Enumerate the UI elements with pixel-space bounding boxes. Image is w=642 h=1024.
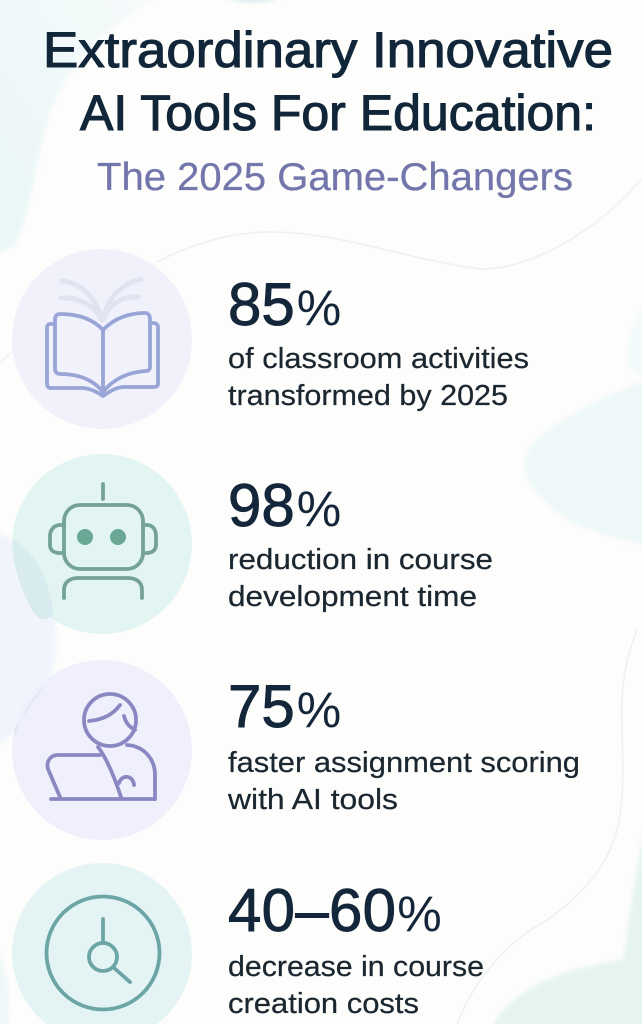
description: reduction in course (228, 544, 493, 576)
description (228, 343, 529, 412)
title: AI Tools For Education: (80, 85, 596, 141)
description: decrease in course (228, 951, 484, 983)
description: development time (228, 581, 477, 613)
stat value: 85% (228, 271, 341, 338)
stat row: 85% (12, 249, 529, 429)
stat row: 40–60% (12, 863, 484, 1024)
stat value: 75% (228, 673, 341, 740)
subtitle: The 2025 Game-Changers (97, 156, 573, 199)
description: with AI tools (227, 784, 398, 816)
icon: clock (12, 863, 192, 1024)
stat value: 40–60% (228, 877, 442, 944)
description: transformed by 2025 (228, 380, 508, 412)
stat value: 98% (228, 472, 341, 539)
title: Extraordinary Innovative (43, 22, 613, 78)
icon: person at laptop (12, 660, 192, 840)
icon: robot (12, 454, 192, 634)
description: creation costs (228, 988, 419, 1020)
description (227, 747, 580, 816)
icon: open book (12, 249, 192, 429)
title (43, 22, 613, 141)
description: of classroom activities (228, 343, 529, 375)
stat row: 98% (12, 454, 493, 634)
stat row: 75% (12, 660, 580, 840)
description (228, 951, 484, 1020)
description: faster assignment scoring (228, 747, 580, 779)
description (228, 544, 493, 613)
